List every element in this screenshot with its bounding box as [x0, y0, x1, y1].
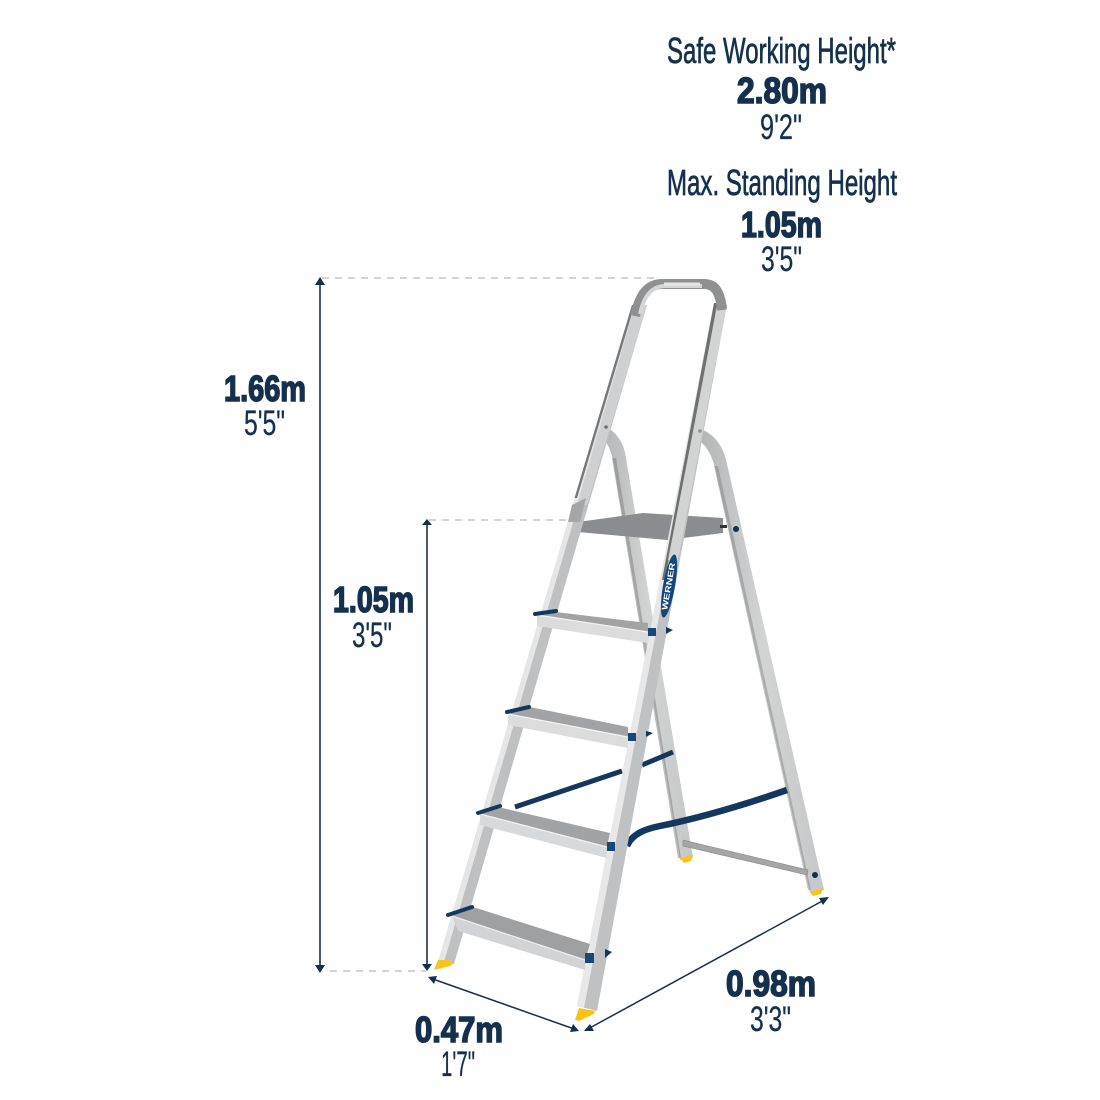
- label: overall height: 1.66m: [224, 368, 306, 409]
- yellow rear feet: [680, 855, 823, 896]
- heading: safe working height: 9'2": [760, 108, 802, 147]
- navy strap: upper: [515, 752, 673, 807]
- label: platform height: 3'5": [352, 616, 392, 655]
- dimension: overall height arrow: [315, 277, 325, 973]
- label: overall height: 5'5": [244, 404, 285, 443]
- label: platform height: 1.05m: [333, 579, 414, 620]
- label: overall height: [224, 368, 306, 443]
- step 1: [535, 611, 673, 643]
- label: base length: 3'3": [750, 1000, 791, 1039]
- platform: [572, 513, 727, 540]
- heading: safe working height: [667, 30, 896, 147]
- top handle: [635, 284, 722, 316]
- heading: max standing height: Max. Standing Height: [667, 162, 897, 203]
- label: base length: [726, 963, 816, 1039]
- heading: safe working height: Safe Working Height*: [667, 30, 896, 71]
- label: depth: [415, 1009, 503, 1084]
- ladder: [434, 284, 824, 1021]
- rear right leg: [701, 430, 824, 893]
- rear spreader bar: [683, 840, 808, 875]
- rear left leg: [603, 427, 693, 860]
- dimension: platform height arrow: [422, 519, 432, 971]
- step 2: [507, 707, 653, 748]
- brand badge: WERNER: [660, 562, 677, 611]
- label: depth: 0.47m: [415, 1009, 503, 1050]
- heading: max standing height: 1.05m: [741, 204, 822, 245]
- navy strap: lower: [627, 790, 787, 846]
- heading: max standing height: 3'5": [761, 240, 802, 279]
- front stile: right: [577, 303, 727, 1011]
- brand badge: [658, 553, 680, 619]
- dashed guide lines: [322, 278, 660, 971]
- front stile: left: [438, 305, 647, 964]
- step 4: [448, 907, 612, 970]
- dimension: base length arrow: [584, 897, 829, 1031]
- heading: max standing height: [667, 162, 897, 279]
- dimension: depth arrow: [428, 976, 579, 1032]
- label: depth: 1'7": [441, 1045, 475, 1084]
- yellow front feet: [434, 960, 595, 1021]
- heading: safe working height: 2.80m: [737, 70, 827, 111]
- label: base length: 0.98m: [726, 963, 816, 1004]
- step 3: [478, 806, 615, 858]
- label: platform height: [333, 579, 414, 655]
